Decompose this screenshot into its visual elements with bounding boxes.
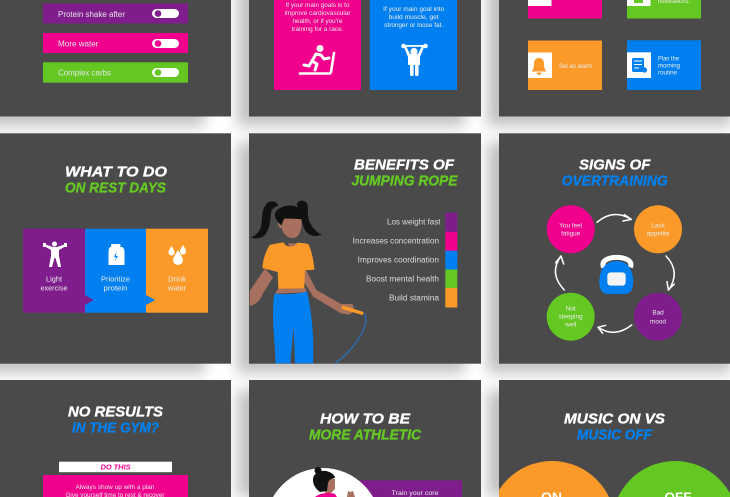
- benefits list: [353, 213, 457, 308]
- circle: bad mood: mood: [650, 318, 666, 325]
- icon: checklist: [632, 58, 647, 73]
- panel: music on vs music off: [489, 380, 730, 497]
- icon: protein jar: [108, 244, 124, 265]
- benefits list: Los weight fast: [387, 218, 441, 227]
- panel: no results in the gym: [0, 380, 231, 497]
- icon: kettlebell: [599, 257, 633, 294]
- title: [309, 411, 422, 444]
- title: MORE ATHLETIC: [309, 427, 422, 444]
- circle: bad mood: Bad: [652, 310, 664, 317]
- card: plan routine: routine: [658, 70, 677, 76]
- panel: cardio vs strength: [249, 0, 481, 116]
- icon: water drops: [168, 245, 186, 265]
- card: strength: stronger or loose fat.: [384, 22, 443, 29]
- title: HOW TO BE: [320, 411, 411, 428]
- panel: signs of overtraining: [499, 133, 730, 364]
- step: light exercise: Light: [46, 277, 62, 284]
- card: strength: If your main goal into: [383, 6, 445, 13]
- illustration: athlete in circle: [273, 467, 373, 497]
- title: IN THE GYM?: [72, 420, 159, 437]
- card: cardio: [274, 0, 361, 90]
- card: notifications: [627, 0, 701, 18]
- step: light exercise: exercise: [40, 286, 68, 293]
- card: plan routine: morning: [658, 62, 680, 70]
- panel: what to do on rest days: [0, 133, 231, 364]
- illustration: girl jumping rope: [250, 201, 366, 363]
- card: cardio: improve cardiovascular: [284, 10, 351, 17]
- card: set an alarm: Set an alarm: [559, 63, 592, 70]
- card: set an alarm: [528, 40, 602, 90]
- card: advice: Always show up with a plan: [76, 484, 155, 491]
- circle: music on: [499, 461, 609, 497]
- title: [564, 411, 665, 444]
- step: light exercise: [23, 229, 85, 313]
- title: SIGNS OF: [579, 156, 651, 173]
- circle: not sleeping well: well: [564, 322, 576, 329]
- circle: not sleeping well: Not: [566, 306, 576, 313]
- card: cardio: health, or if you're: [292, 18, 343, 25]
- step: prioritize protein: Prioritize: [101, 277, 130, 284]
- toggle row: more water: More water: [58, 40, 99, 48]
- card: pink: [528, 0, 602, 18]
- card: cardio: If your main goals is to: [286, 2, 350, 9]
- card: strength: build muscle, get: [389, 14, 439, 21]
- icon: treadmill runner: [300, 45, 334, 74]
- icon: weightlifter: [401, 44, 428, 76]
- toggle row: protein shake: [43, 4, 188, 24]
- title: [68, 404, 163, 437]
- panel: how to be more athletic: [249, 380, 481, 497]
- icon: dumbbell figure: [43, 242, 67, 267]
- circle: you feel fatigue: fatigue: [561, 230, 581, 238]
- title: WHAT TO DO: [65, 164, 167, 181]
- toggle row: complex carbs: [43, 62, 188, 83]
- benefits list: Boost mental health: [366, 274, 439, 284]
- circle: bad mood: [634, 293, 682, 341]
- step: drink water: Drink: [168, 277, 187, 284]
- step: drink water: [146, 229, 208, 313]
- circle: you feel fatigue: You feel: [559, 222, 582, 229]
- title: JUMPING ROPE: [352, 172, 458, 189]
- title: [65, 164, 167, 197]
- card: advice: [43, 475, 188, 497]
- title: MUSIC ON VS: [564, 411, 665, 428]
- card: plan routine: [627, 40, 701, 90]
- toggle row: more water: [43, 33, 188, 53]
- title: OVERTRAINING: [562, 172, 668, 189]
- circle: not sleeping well: sleeping: [559, 314, 583, 321]
- circle: lack appetite: appetite: [647, 230, 670, 238]
- card: plan routine: Plan the: [658, 56, 679, 62]
- circle: not sleeping well: [547, 293, 595, 341]
- step: prioritize protein: protein: [104, 286, 128, 293]
- step: prioritize protein: [85, 229, 146, 313]
- step: drink water: water: [167, 286, 187, 293]
- panel: morning tips: [499, 0, 730, 116]
- banner: do this: [59, 462, 172, 472]
- panel: nutrition toggles: [0, 0, 231, 116]
- circle: music off: [612, 461, 730, 497]
- benefits list: Improves coordination: [358, 256, 439, 264]
- panel: benefits of jumping rope: [249, 133, 481, 364]
- circle: lack appetite: Lack: [651, 222, 666, 229]
- title: ON REST DAYS: [65, 180, 166, 197]
- title: MUSIC OFF: [577, 427, 653, 444]
- title: BENEFITS OF: [354, 156, 455, 173]
- cycle arrows: [555, 214, 674, 333]
- benefits list: Increases concentration: [353, 236, 439, 246]
- banner: do this: DO THIS: [100, 462, 130, 472]
- card: train your core: Train your core: [392, 490, 439, 497]
- benefits list: Build stamina: [389, 294, 440, 302]
- icon: bell: [532, 58, 546, 75]
- circle: you feel fatigue: [547, 205, 595, 253]
- circle: lack appetite: [634, 205, 682, 253]
- card: strength: [370, 0, 457, 90]
- title: [352, 156, 458, 189]
- title: NO RESULTS: [68, 404, 163, 421]
- card: train your core: [350, 480, 462, 497]
- card: cardio: training for a race.: [292, 26, 344, 33]
- toggle row: complex carbs: Complex carbs: [58, 68, 111, 78]
- toggle row: protein shake: Protein shake after: [58, 10, 125, 19]
- title: [562, 156, 668, 189]
